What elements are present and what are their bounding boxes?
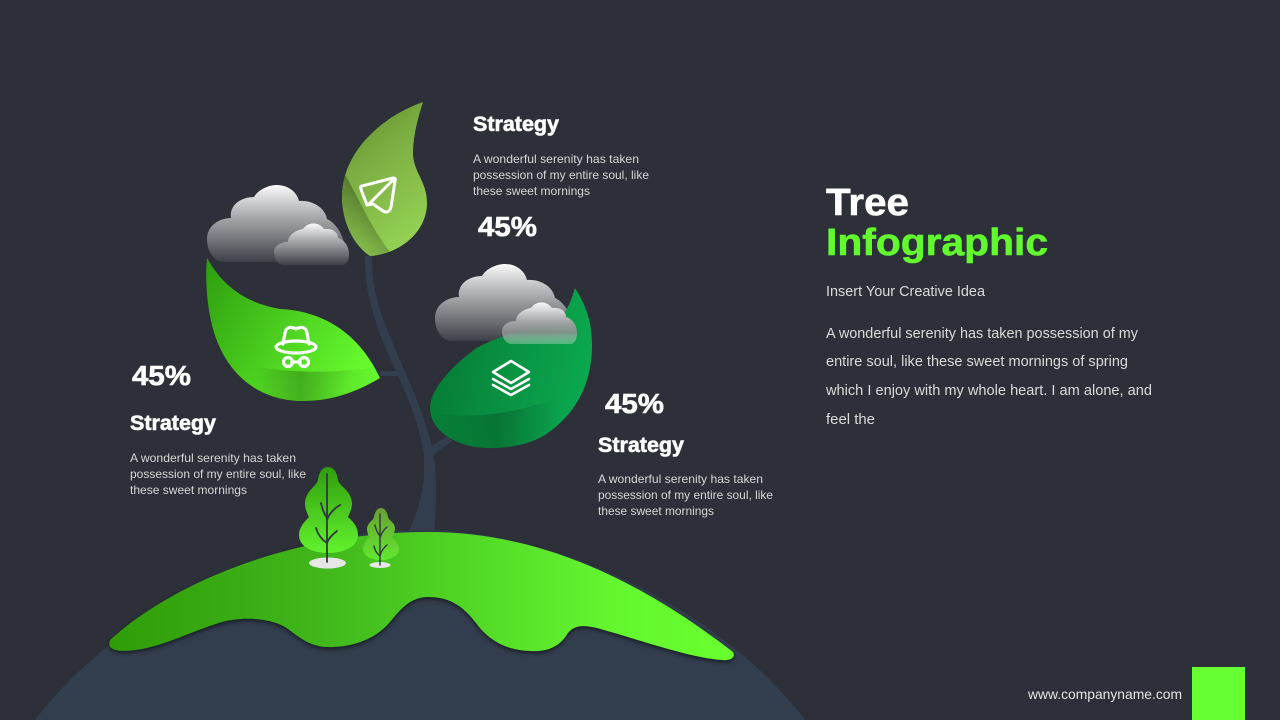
description: A wonderful serenity has taken possession of my [826,325,1138,342]
title [826,182,1048,264]
description: entire soul, like these sweet mornings of spring [826,353,1128,370]
leaf: left [204,256,385,404]
text block: left strategy: Strategy [130,412,216,435]
icon: incognito hat [276,327,316,366]
percent: left: 45% [132,360,191,391]
description: feel the [826,411,875,428]
planet [35,530,805,720]
cloud: middle [435,264,573,341]
small tree: large [299,467,358,568]
text block: right strategy: possession of my entire soul, like [598,488,773,502]
text block: top strategy: these sweet mornings [473,184,590,198]
tree stem [365,256,452,536]
text block: left strategy [130,412,306,497]
text block: left strategy: possession of my entire soul, like [130,467,306,481]
text block: top strategy [473,113,649,198]
leaf: top [342,102,427,256]
text block: left strategy: these sweet mornings [130,483,247,497]
cloud: upper left [207,185,349,265]
green square [1192,667,1245,720]
title: Tree [826,182,909,224]
text block: right strategy: Strategy [598,434,684,457]
percent: top: 45% [478,211,537,242]
small tree: small [363,508,399,568]
icon: layers [493,361,529,395]
text block: top strategy: Strategy [473,113,559,136]
text block: right strategy: these sweet mornings [598,504,714,518]
icon: paper plane [361,178,395,212]
leaf: right [428,286,594,452]
text block: right strategy: A wonderful serenity has taken [598,472,763,486]
text block: top strategy: A wonderful serenity has taken [473,152,639,166]
cloud: small over right leaf [502,302,577,344]
hill [109,532,734,660]
description: which I enjoy with my whole heart. I am alone, and [825,382,1152,399]
title: Infographic [826,222,1048,264]
percent: right: 45% [605,388,664,419]
text block: left strategy: A wonderful serenity has taken [130,451,296,465]
website url: www.companyname.com [1027,686,1182,702]
description [825,325,1152,428]
text block: top strategy: possession of my entire soul, like [473,168,649,182]
subtitle: Insert Your Creative Idea [826,283,986,300]
text block: right strategy [598,434,773,518]
